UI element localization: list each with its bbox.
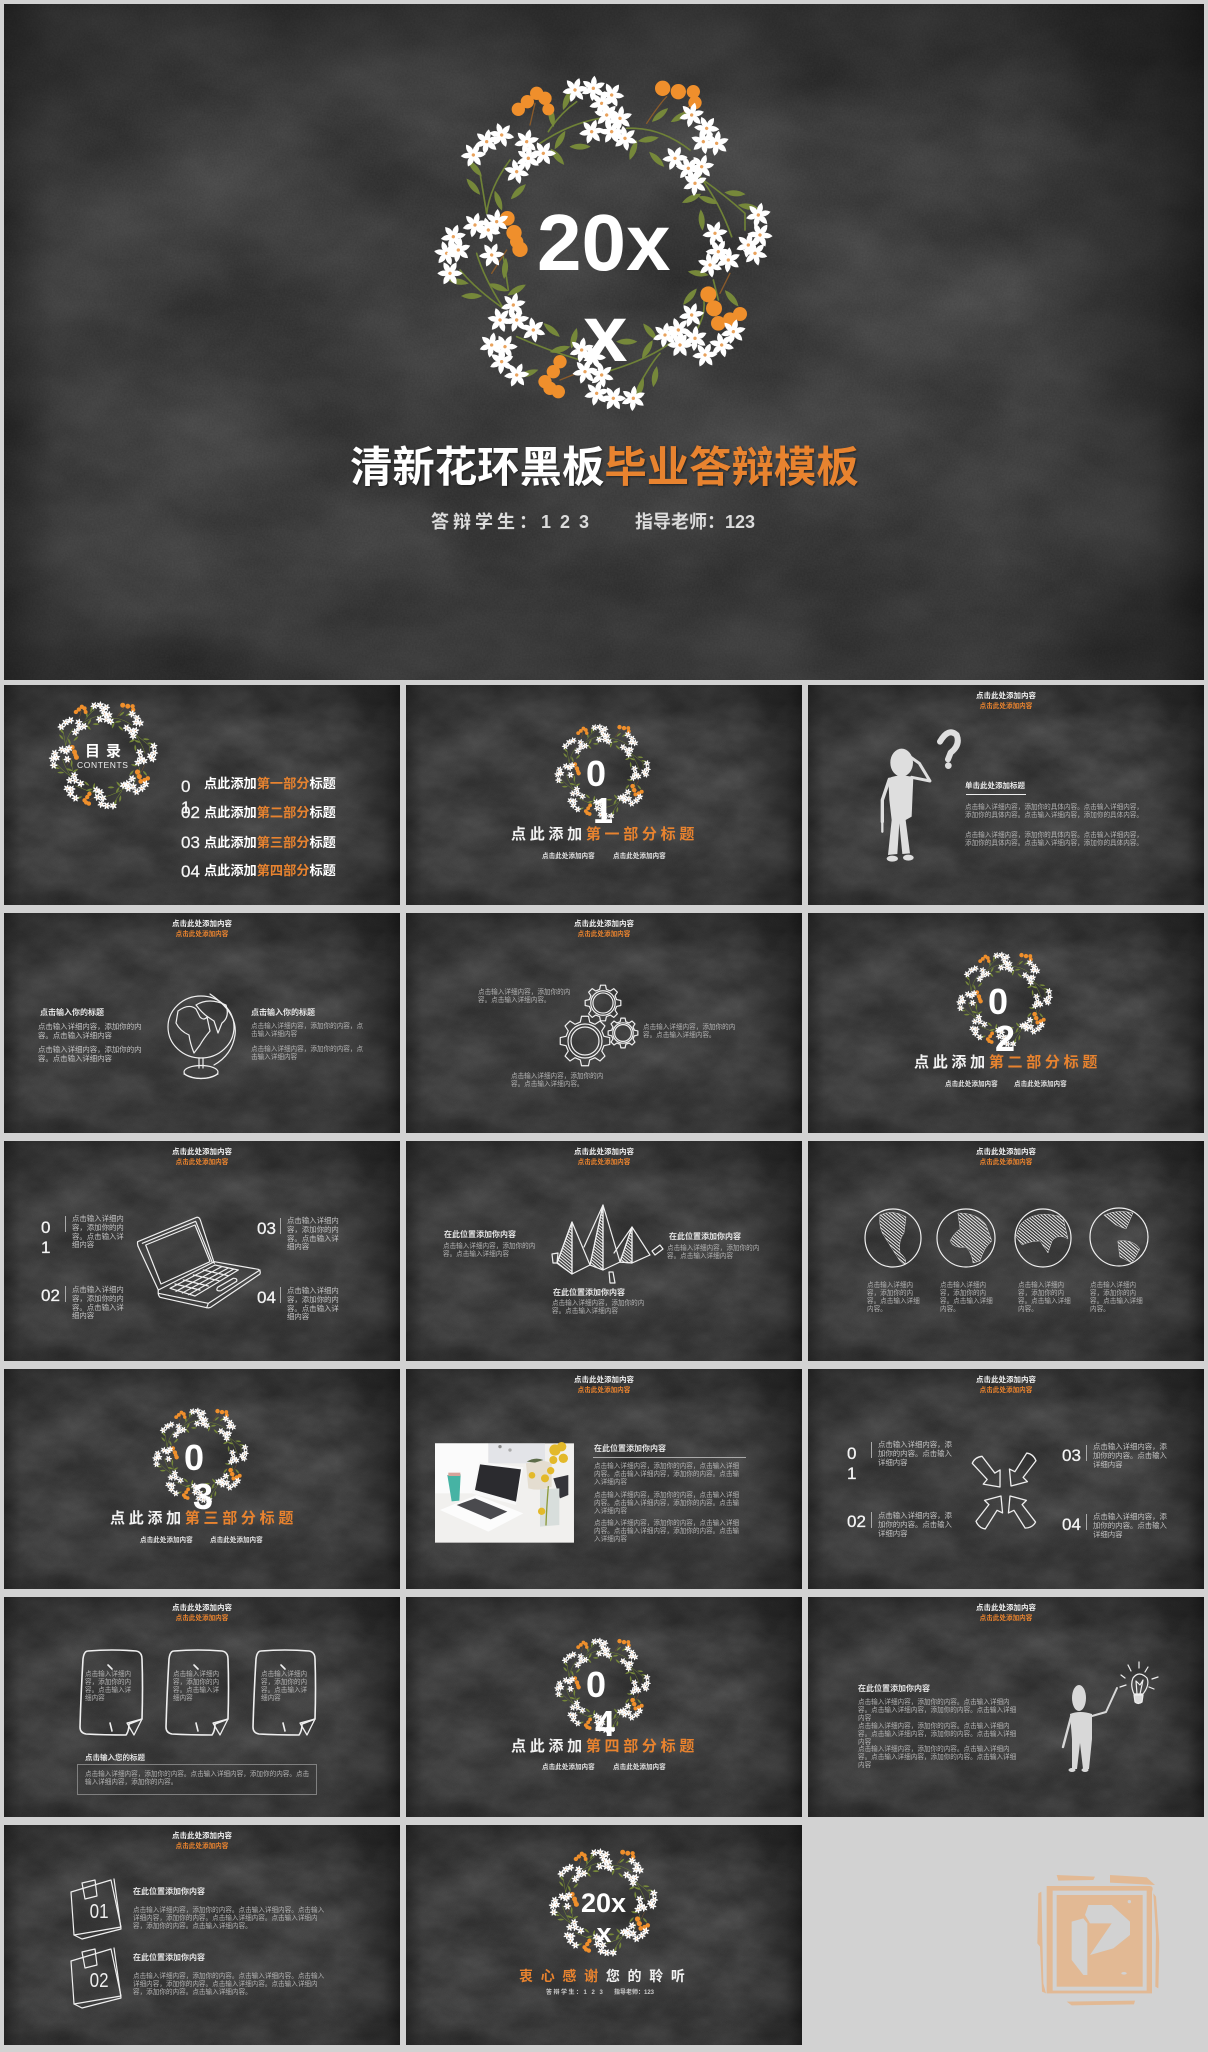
paragraph 1	[594, 1463, 739, 1487]
text 04: 细内容	[287, 1312, 309, 1321]
right text: 点击输入详细内容，添加你的内	[667, 1245, 759, 1252]
paragraph 1: 内容。点击输入详细内容，添加你的内容。点击输	[594, 1471, 739, 1478]
text 04: 加你的内容。点击输入	[1093, 1521, 1167, 1530]
section caption left: 点击此处添加内容	[140, 1536, 193, 1544]
paragraph 1	[965, 803, 1143, 819]
caption 1: 点击输入详细内	[867, 1282, 913, 1289]
section caption left: 点击此处添加内容	[945, 1080, 998, 1088]
caption 1: 容。点击输入详细	[867, 1298, 920, 1305]
panel: photo slide	[406, 1369, 802, 1589]
heading: 点击此处添加内容	[172, 918, 232, 928]
number 01: 0	[847, 1444, 856, 1462]
caption 4: 容，添加你的内	[1090, 1290, 1136, 1297]
text 01: 容。点击输入详	[72, 1232, 124, 1241]
text 01: 点击输入详细内	[72, 1214, 124, 1223]
text 02: 详细内容	[878, 1529, 908, 1538]
text 01	[878, 1441, 952, 1467]
item 02 text	[133, 1973, 324, 1997]
panel: cover slide	[4, 4, 1204, 680]
text 02: 加你的内容。点击输入	[878, 1520, 952, 1529]
left paragraph 1: 点击输入详细内容，添加你的内	[38, 1022, 141, 1031]
paragraph: 容。点击输入详细内容，添加你的内容。点击输入详细	[858, 1754, 1016, 1761]
item 03 text: 点此添加第三部分标题	[204, 835, 336, 850]
right paragraph 2	[251, 1045, 363, 1061]
paragraph 2: 内容。点击输入详细内容，添加你的内容。点击输	[594, 1500, 739, 1507]
caption 2	[940, 1282, 993, 1314]
item 02 title: 在此位置添加你内容	[133, 1953, 205, 1962]
block title: 在此位置添加你内容	[594, 1444, 666, 1453]
card text 2	[173, 1671, 219, 1703]
divider	[280, 1287, 281, 1303]
caption 2: 容，添加你的内	[940, 1290, 986, 1297]
section title: 点此添加第三部分标题	[110, 1510, 297, 1526]
paragraph 1: 入详细内容	[594, 1479, 627, 1486]
advisor name: 指导老师：123	[614, 1990, 654, 1996]
panel: laptop slide	[4, 1141, 400, 1361]
paragraph 1: 点击输入详细内容，添加你的具体内容。点击输入详细内容，	[965, 804, 1143, 811]
icon: paper card 1	[80, 1650, 142, 1735]
icon: clipped note 01	[71, 1879, 121, 1939]
caption 4: 容。点击输入详细	[1090, 1298, 1143, 1305]
bottom text: 点击输入详细内容，添加你的内	[552, 1300, 644, 1307]
number 01: 1	[847, 1464, 856, 1482]
text 01	[72, 1214, 124, 1249]
note number 02: 02	[90, 1970, 109, 1992]
paragraph: 内容	[858, 1715, 871, 1722]
text bottom	[511, 1072, 603, 1088]
bottom text: 容。点击输入详细内容	[552, 1308, 618, 1315]
card text 1	[85, 1671, 131, 1703]
subheading: 点击此处添加内容	[176, 931, 228, 938]
student name: 答辩学生：1 2 3	[546, 1990, 604, 1996]
number 01	[847, 1444, 856, 1484]
item number 02: 02	[181, 802, 200, 822]
divider	[1086, 1445, 1087, 1461]
icon: earth 1	[865, 1209, 921, 1267]
panel: numbered notes slide	[4, 1825, 400, 2045]
paragraph 2: 点击输入详细内容，添加你的具体内容。点击输入详细内容，	[965, 832, 1143, 839]
icon: four arrows pointing to center	[968, 1449, 1041, 1533]
paragraph: 点击输入详细内容，添加你的内容。点击输入详细内	[858, 1746, 1010, 1753]
caption 4: 内容。	[1090, 1306, 1110, 1313]
box text: 输入详细内容，添加你的内容。	[85, 1779, 177, 1786]
divider	[593, 1457, 746, 1458]
card text 2: 细内容	[173, 1695, 193, 1702]
icon: flower wreath	[956, 952, 1053, 1047]
paragraph: 点击输入详细内容，添加你的内容。点击输入详细内	[858, 1699, 1010, 1706]
divider	[1086, 1514, 1087, 1530]
left title: 在此位置添加你内容	[444, 1230, 516, 1239]
text 03: 细内容	[287, 1242, 309, 1251]
text right	[643, 1023, 735, 1039]
paragraph 3: 点击输入详细内容，添加你的内容，点击输入详细	[594, 1520, 739, 1527]
paragraph 2	[965, 831, 1143, 847]
icon: light bulb	[1120, 1662, 1158, 1704]
subheading: 点击此处添加内容	[980, 703, 1032, 710]
caption 1: 内容。	[867, 1306, 887, 1313]
paragraph 2: 添加你的具体内容。点击输入详细内容，添加你的具体内容。	[965, 840, 1143, 847]
text 03	[287, 1216, 339, 1251]
item number 01: 1	[181, 798, 190, 817]
subheading: 点击此处添加内容	[176, 1843, 228, 1850]
panel: four earths slide	[808, 1141, 1204, 1361]
paragraph: 内容	[858, 1762, 871, 1769]
left paragraph 1	[38, 1022, 141, 1040]
icon: chalk person with question mark	[882, 732, 958, 862]
item 04 text: 点此添加第四部分标题	[204, 863, 336, 878]
heading: 点击此处添加内容	[976, 1374, 1036, 1384]
text 04: 容。点击输入详	[287, 1304, 339, 1313]
panel: paper cards slide	[4, 1597, 400, 1817]
panel: gears slide	[406, 913, 802, 1133]
note number 01: 01	[90, 1901, 109, 1923]
text 01: 加你的内容。点击输入	[878, 1449, 952, 1458]
text 03	[1093, 1443, 1167, 1469]
student name: 答辩学生：1 2 3	[431, 512, 591, 532]
paragraph: 内容	[858, 1739, 871, 1746]
right paragraph 1: 击输入详细内容	[251, 1031, 297, 1038]
text 04: 点击输入详细内	[287, 1286, 339, 1295]
card text 1: 细内容	[85, 1695, 105, 1702]
paragraph 3: 入详细内容	[594, 1536, 627, 1543]
section title: 点此添加第二部分标题	[914, 1054, 1101, 1071]
text 01: 详细内容	[878, 1458, 908, 1467]
card text 3	[261, 1671, 307, 1703]
right title: 在此位置添加你内容	[669, 1232, 741, 1241]
right paragraph 2: 点击输入详细内容，添加你的内容，点	[251, 1046, 363, 1053]
icon: earth 3	[1015, 1209, 1071, 1267]
content heading: 单击此处添加标题	[965, 781, 1025, 790]
text 03: 点击输入详细内容，添	[1093, 1442, 1167, 1451]
caption 3: 容。点击输入详细	[1018, 1298, 1071, 1305]
left text	[443, 1242, 535, 1258]
icon: earth 2	[937, 1209, 995, 1267]
card text 2: 点击输入详细内	[173, 1671, 219, 1678]
card text 3: 容，添加你的内	[261, 1679, 307, 1686]
card text 3: 容。点击输入详	[261, 1687, 307, 1694]
icon: earth 4	[1090, 1208, 1148, 1266]
heading: 点击此处添加内容	[574, 1146, 634, 1156]
item 02 text: 容，添加你的内容。点击输入详细内容。	[133, 1989, 252, 1996]
card text 3: 细内容	[261, 1695, 281, 1702]
text top left: 点击输入详细内容，添加你的内	[478, 989, 570, 996]
number 03: 03	[1062, 1446, 1081, 1464]
subheading: 点击此处添加内容	[578, 1159, 630, 1166]
contents subheading: CONTENTS	[77, 760, 129, 770]
right text	[667, 1245, 759, 1261]
subheading: 点击此处添加内容	[578, 931, 630, 938]
number 02: 02	[847, 1512, 866, 1530]
section number first digit: 0	[184, 1436, 204, 1478]
item number 01	[181, 777, 190, 817]
text 03: 容。点击输入详	[287, 1234, 339, 1243]
panel: section 02 slide	[808, 913, 1204, 1133]
item 01 text: 容，添加你的内容。点击输入详细内容。	[133, 1923, 252, 1930]
left block title: 点击输入你的标题	[40, 1008, 104, 1017]
right text: 容。点击输入详细内容	[667, 1253, 733, 1260]
text 01: 容，添加你的内	[72, 1223, 124, 1232]
text 02	[72, 1285, 124, 1320]
icon: paper card 2	[166, 1650, 228, 1735]
text bottom: 点击输入详细内容，添加你的内	[511, 1073, 603, 1080]
text 04: 容，添加你的内	[287, 1295, 339, 1304]
panel: contents slide	[4, 685, 400, 905]
text 03: 点击输入详细内	[287, 1216, 339, 1225]
text 04: 详细内容	[1093, 1530, 1123, 1539]
left paragraph 2: 容。点击输入详细内容	[38, 1054, 112, 1063]
paragraph 1: 点击输入详细内容，添加你的内容，点击输入详细	[594, 1463, 739, 1470]
paragraph 1: 添加你的具体内容。点击输入详细内容，添加你的具体内容。	[965, 812, 1143, 819]
heading: 点击此处添加内容	[172, 1146, 232, 1156]
icon: three pyramids with arrows	[552, 1205, 663, 1283]
card text 2: 容，添加你的内	[173, 1679, 219, 1686]
paragraph: 容。点击输入详细内容，添加你的内容。点击输入详细	[858, 1707, 1016, 1714]
subheading: 点击此处添加内容	[578, 1387, 630, 1394]
panel: section 03 slide	[4, 1369, 400, 1589]
section caption left: 点击此处添加内容	[542, 1764, 595, 1771]
section caption right: 点击此处添加内容	[1014, 1080, 1067, 1088]
number 01: 0	[41, 1218, 50, 1236]
icon: flower wreath	[434, 76, 772, 411]
paragraph 2: 入详细内容	[594, 1508, 627, 1515]
heading: 点击此处添加内容	[172, 1602, 232, 1612]
number 04: 04	[1062, 1514, 1081, 1534]
section caption right: 点击此处添加内容	[613, 852, 666, 860]
item 01 title: 在此位置添加你内容	[133, 1887, 205, 1896]
item 02 text: 点击输入详细内容，添加你的内容。点击输入详细内容。点击输入	[133, 1973, 324, 1980]
card text 3: 点击输入详细内	[261, 1671, 307, 1678]
image: laptop on white desk	[435, 1442, 574, 1543]
text 01: 细内容	[72, 1240, 94, 1249]
panel: section 04 slide	[406, 1597, 802, 1817]
item 01 text: 点此添加第一部分标题	[204, 776, 336, 791]
box text	[85, 1771, 309, 1787]
paragraph 2: 点击输入详细内容，添加你的内容，点击输入详细	[594, 1492, 739, 1499]
icon: chalk person pointing	[1063, 1685, 1117, 1772]
year number: 20x	[581, 1888, 626, 1918]
icon: laptop	[137, 1217, 260, 1308]
card text 1: 容，添加你的内	[85, 1679, 131, 1686]
section number second digit: 2	[995, 1018, 1015, 1059]
item 01 text: 详细内容，添加你的内容。点击输入详细内容。点击输入详细内	[133, 1915, 318, 1922]
caption 4	[1090, 1282, 1143, 1314]
year number wrapped character: x	[583, 289, 628, 378]
icon: flower wreath	[48, 701, 158, 810]
icon: flower wreath	[554, 724, 651, 820]
panel: converging arrows slide	[808, 1369, 1204, 1589]
section title: 点此添加第四部分标题	[511, 1738, 698, 1754]
panel: thank you slide	[406, 1825, 802, 2045]
divider	[871, 1442, 872, 1458]
panel: light bulb person slide	[808, 1597, 1204, 1817]
year number wrapped character: x	[596, 1918, 612, 1948]
card text 1: 容。点击输入详	[85, 1687, 131, 1694]
icon: desk globe	[168, 994, 235, 1078]
paragraph	[858, 1699, 1016, 1770]
block title: 在此位置添加你内容	[858, 1684, 930, 1693]
caption 2: 点击输入详细内	[940, 1282, 986, 1289]
text 02: 容。点击输入详	[72, 1303, 124, 1312]
text 03: 详细内容	[1093, 1460, 1123, 1469]
text 02: 点击输入详细内	[72, 1285, 124, 1294]
contents heading: 目录	[85, 743, 127, 760]
icon: three gears	[560, 985, 638, 1066]
icon: clipped note 02	[71, 1948, 121, 2008]
right paragraph 1	[251, 1022, 363, 1038]
item number 01: 0	[181, 777, 190, 796]
number 04: 04	[257, 1288, 276, 1306]
subheading: 点击此处添加内容	[980, 1159, 1032, 1166]
box text: 点击输入详细内容，添加你的内容。点击输入详细内容，添加你的内容。点击	[85, 1771, 309, 1778]
item number 04: 04	[181, 862, 200, 880]
subheading: 点击此处添加内容	[980, 1387, 1032, 1394]
section number second digit: 1	[593, 790, 613, 831]
number 01: 1	[41, 1238, 50, 1256]
text right: 点击输入详细内容，添加你的内	[643, 1024, 735, 1031]
panel: pyramids slide	[406, 1141, 802, 1361]
caption 3	[1018, 1282, 1071, 1314]
divider	[65, 1286, 66, 1302]
text 04	[287, 1286, 339, 1321]
subheading: 点击此处添加内容	[176, 1159, 228, 1166]
section number first digit: 0	[988, 980, 1008, 1022]
section caption left: 点击此处添加内容	[542, 852, 595, 860]
text 01: 点击输入详细内容，添	[878, 1440, 952, 1449]
text 02: 点击输入详细内容，添	[878, 1511, 952, 1520]
divider	[871, 1512, 872, 1528]
caption 2: 内容。	[940, 1306, 960, 1313]
heading: 点击此处添加内容	[574, 1374, 634, 1384]
text 02: 容，添加你的内	[72, 1294, 124, 1303]
logo watermark	[1030, 1860, 1170, 2010]
bottom title: 在此位置添加你内容	[553, 1288, 625, 1297]
section caption right: 点击此处添加内容	[613, 1764, 666, 1771]
title: 清新花环黑板毕业答辩模板	[350, 444, 859, 491]
paragraph: 点击输入详细内容，添加你的内容。点击输入详细内	[858, 1723, 1010, 1730]
section title: 点此添加第一部分标题	[511, 826, 698, 843]
paragraph 3: 内容。点击输入详细内容，添加你的内容。点击输	[594, 1528, 739, 1535]
right paragraph 2: 击输入详细内容	[251, 1054, 297, 1061]
left text: 容。点击输入详细内容	[443, 1251, 509, 1258]
text 04: 点击输入详细内容，添	[1093, 1512, 1167, 1521]
panel: thinking person slide	[808, 685, 1204, 905]
text 03: 容，添加你的内	[287, 1225, 339, 1234]
right block title: 点击输入你的标题	[251, 1008, 315, 1017]
heading: 点击此处添加内容	[976, 1146, 1036, 1156]
divider	[280, 1218, 281, 1234]
card text 2: 容。点击输入详	[173, 1687, 219, 1694]
text 02	[878, 1512, 952, 1538]
right paragraph 1: 点击输入详细内容，添加你的内容，点	[251, 1023, 363, 1030]
panel: section 01 slide	[406, 685, 802, 905]
outlined text box	[77, 1764, 317, 1795]
number 01	[41, 1218, 50, 1256]
bottom text	[552, 1300, 644, 1316]
year number: 20x	[537, 198, 670, 287]
paragraph: 容。点击输入详细内容，添加你的内容。点击输入详细	[858, 1731, 1016, 1738]
divider under heading	[966, 794, 1026, 795]
icon: flower wreath	[550, 1633, 656, 1739]
text bottom: 容。点击输入详细内容。	[511, 1081, 584, 1088]
left text: 点击输入详细内容，添加你的内	[443, 1243, 535, 1250]
thank you title: 衷心感谢您的聆听	[519, 1968, 693, 1984]
item number 03: 03	[181, 832, 200, 852]
number 02: 02	[41, 1286, 60, 1304]
section number second digit: 3	[193, 1476, 213, 1517]
text 04	[1093, 1513, 1167, 1539]
left paragraph 2	[38, 1045, 141, 1063]
caption 2: 容。点击输入详细	[940, 1298, 993, 1305]
caption 4: 点击输入详细内	[1090, 1282, 1136, 1289]
text right: 容。点击输入详细内容。	[643, 1032, 716, 1039]
card text 1: 点击输入详细内	[85, 1671, 131, 1678]
section number first digit: 0	[586, 752, 606, 794]
item 01 text	[133, 1907, 324, 1931]
text 02: 细内容	[72, 1311, 94, 1320]
icon: flower wreath	[544, 1843, 664, 1963]
icon: flower wreath	[148, 1403, 254, 1509]
icon: paper card 3	[253, 1650, 316, 1735]
number 03: 03	[257, 1218, 276, 1238]
left paragraph 2: 点击输入详细内容，添加你的内	[38, 1045, 141, 1054]
caption 1	[867, 1282, 920, 1314]
caption 3: 点击输入详细内	[1018, 1282, 1064, 1289]
divider	[65, 1216, 66, 1232]
heading: 点击此处添加内容	[976, 690, 1036, 700]
item 02 text: 详细内容，添加你的内容。点击输入详细内容。点击输入详细内	[133, 1981, 318, 1988]
panel: globe slide	[4, 913, 400, 1133]
caption 3: 内容。	[1018, 1306, 1038, 1313]
left paragraph 1: 容。点击输入详细内容	[38, 1031, 112, 1040]
caption 3: 容，添加你的内	[1018, 1290, 1064, 1297]
item 02 text: 点此添加第二部分标题	[204, 805, 336, 820]
text top left	[478, 988, 570, 1004]
section number first digit: 0	[586, 1664, 606, 1705]
heading: 点击此处添加内容	[574, 918, 634, 928]
paragraph 3	[594, 1520, 739, 1544]
text top left: 容。点击输入详细内容。	[478, 997, 551, 1004]
box title: 点击输入您的标题	[85, 1752, 145, 1762]
item 01 text: 点击输入详细内容，添加你的内容。点击输入详细内容。点击输入	[133, 1907, 324, 1914]
advisor name: 指导老师：123	[635, 512, 755, 532]
heading: 点击此处添加内容	[172, 1830, 232, 1840]
section number second digit: 4	[595, 1703, 615, 1744]
caption 1: 容，添加你的内	[867, 1290, 913, 1297]
subheading: 点击此处添加内容	[980, 1615, 1032, 1622]
paragraph 2	[594, 1492, 739, 1516]
subheading: 点击此处添加内容	[176, 1615, 228, 1622]
heading: 点击此处添加内容	[976, 1602, 1036, 1612]
text 03: 加你的内容。点击输入	[1093, 1451, 1167, 1460]
section caption right: 点击此处添加内容	[210, 1536, 263, 1544]
